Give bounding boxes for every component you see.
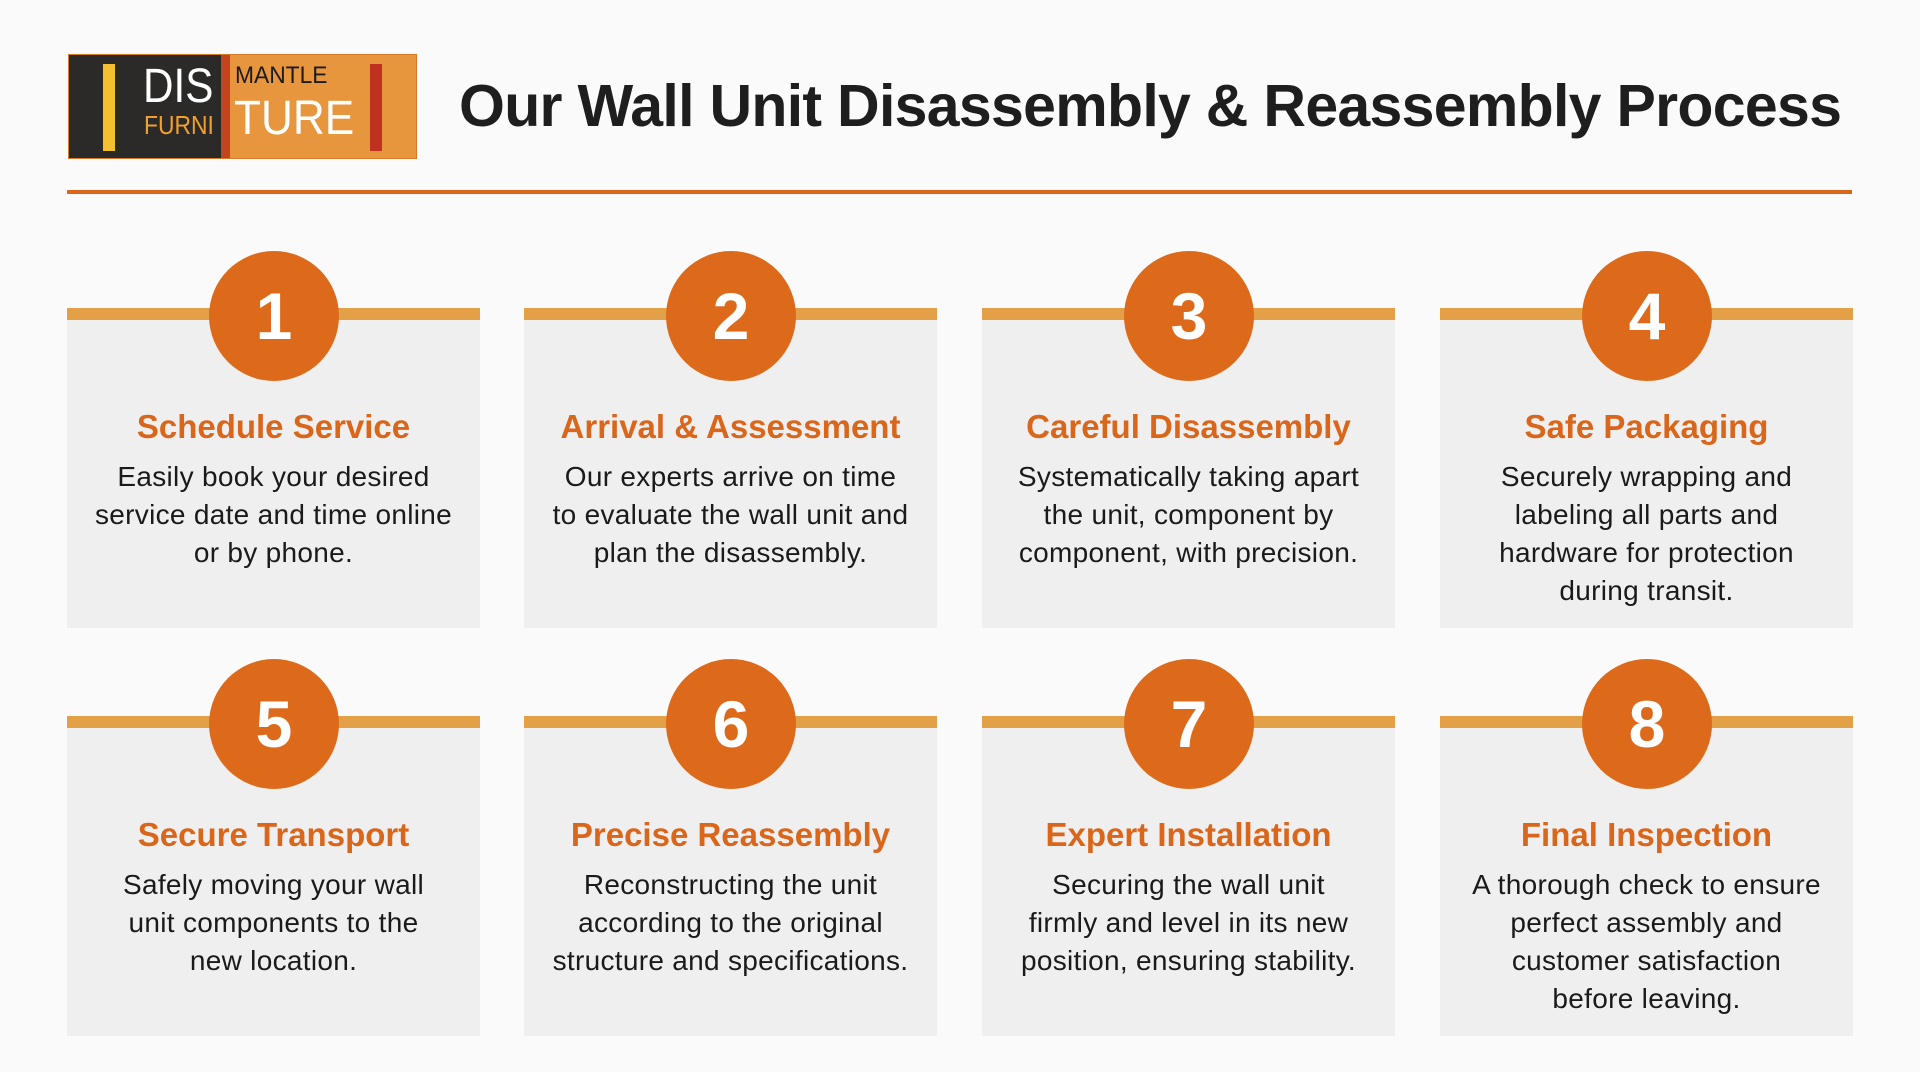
panel: step 5: unit components to the [129, 907, 418, 938]
logo [68, 54, 417, 159]
panel: step 7 [982, 716, 1395, 1036]
panel: step 1: service date and time online [95, 499, 452, 530]
panel: step 2 [524, 308, 937, 628]
panel: step 3: the unit, component by [1044, 499, 1333, 530]
panel: step 8: 8 [1629, 687, 1665, 761]
panel: step 8: A thorough check to ensure [1472, 869, 1821, 900]
panel: step 7: Expert Installation [1045, 816, 1332, 853]
panel: step 3 [982, 308, 1395, 628]
panel: step 2: plan the disassembly. [594, 537, 867, 568]
panel: step 5: 5 [256, 687, 292, 761]
panel: step 7: 7 [1171, 687, 1207, 761]
panel: step 1: Schedule Service [137, 408, 410, 445]
panel: step 5: Safely moving your wall [123, 869, 424, 900]
panel: step 6 [524, 716, 937, 1036]
panel: step 3: 3 [1171, 279, 1207, 353]
panel: step 4: 4 [1629, 279, 1665, 353]
panel: step 6: 6 [713, 687, 749, 761]
panel: step 7: firmly and level in its new [1029, 907, 1348, 938]
panel: step 2: to evaluate the wall unit and [553, 499, 908, 530]
panel: step 4: Safe Packaging [1525, 408, 1768, 445]
panel: step 4: during transit. [1559, 575, 1734, 606]
panel: step 8 [1440, 716, 1853, 1036]
panel: step 7: Securing the wall unit [1052, 869, 1325, 900]
logo: DIS [143, 60, 213, 113]
panel: step 2: Our experts arrive on time [565, 461, 896, 492]
panel: step 4: labeling all parts and [1515, 499, 1778, 530]
panel: step 3: Careful Disassembly [1026, 408, 1351, 445]
panel: step 3: component, with precision. [1019, 537, 1358, 568]
panel: step 7: position, ensuring stability. [1021, 945, 1356, 976]
panel: step 8: before leaving. [1552, 983, 1741, 1014]
panel: step 4: hardware for protection [1499, 537, 1794, 568]
panel: step 1 [67, 308, 480, 628]
logo: MANTLE [235, 62, 327, 89]
panel: step 6: Reconstructing the unit [584, 869, 877, 900]
panel: step 4: Securely wrapping and [1501, 461, 1792, 492]
panel: step 5 [67, 716, 480, 1036]
panel: step 8: Final Inspection [1521, 816, 1772, 853]
logo: TURE [234, 92, 354, 145]
panel: step 6: Precise Reassembly [571, 816, 890, 853]
panel: step 8: customer satisfaction [1512, 945, 1781, 976]
panel: step 4 [1440, 308, 1853, 628]
panel: step 1: Easily book your desired [117, 461, 430, 492]
title: Our Wall Unit Disassembly & Reassembly Process [459, 73, 1841, 139]
panel: step 5: new location. [190, 945, 357, 976]
panel: step 3: Systematically taking apart [1018, 461, 1359, 492]
panel: step 1: or by phone. [194, 537, 353, 568]
panel: step 6: structure and specifications. [553, 945, 908, 976]
panel: step 2: Arrival & Assessment [561, 408, 900, 445]
panel: step 1: 1 [256, 279, 292, 353]
panel: step 6: according to the original [578, 907, 883, 938]
logo: FURNI [144, 110, 214, 140]
panel: step 5: Secure Transport [138, 816, 409, 853]
panel: step 2: 2 [713, 279, 749, 353]
panel: step 8: perfect assembly and [1510, 907, 1783, 938]
